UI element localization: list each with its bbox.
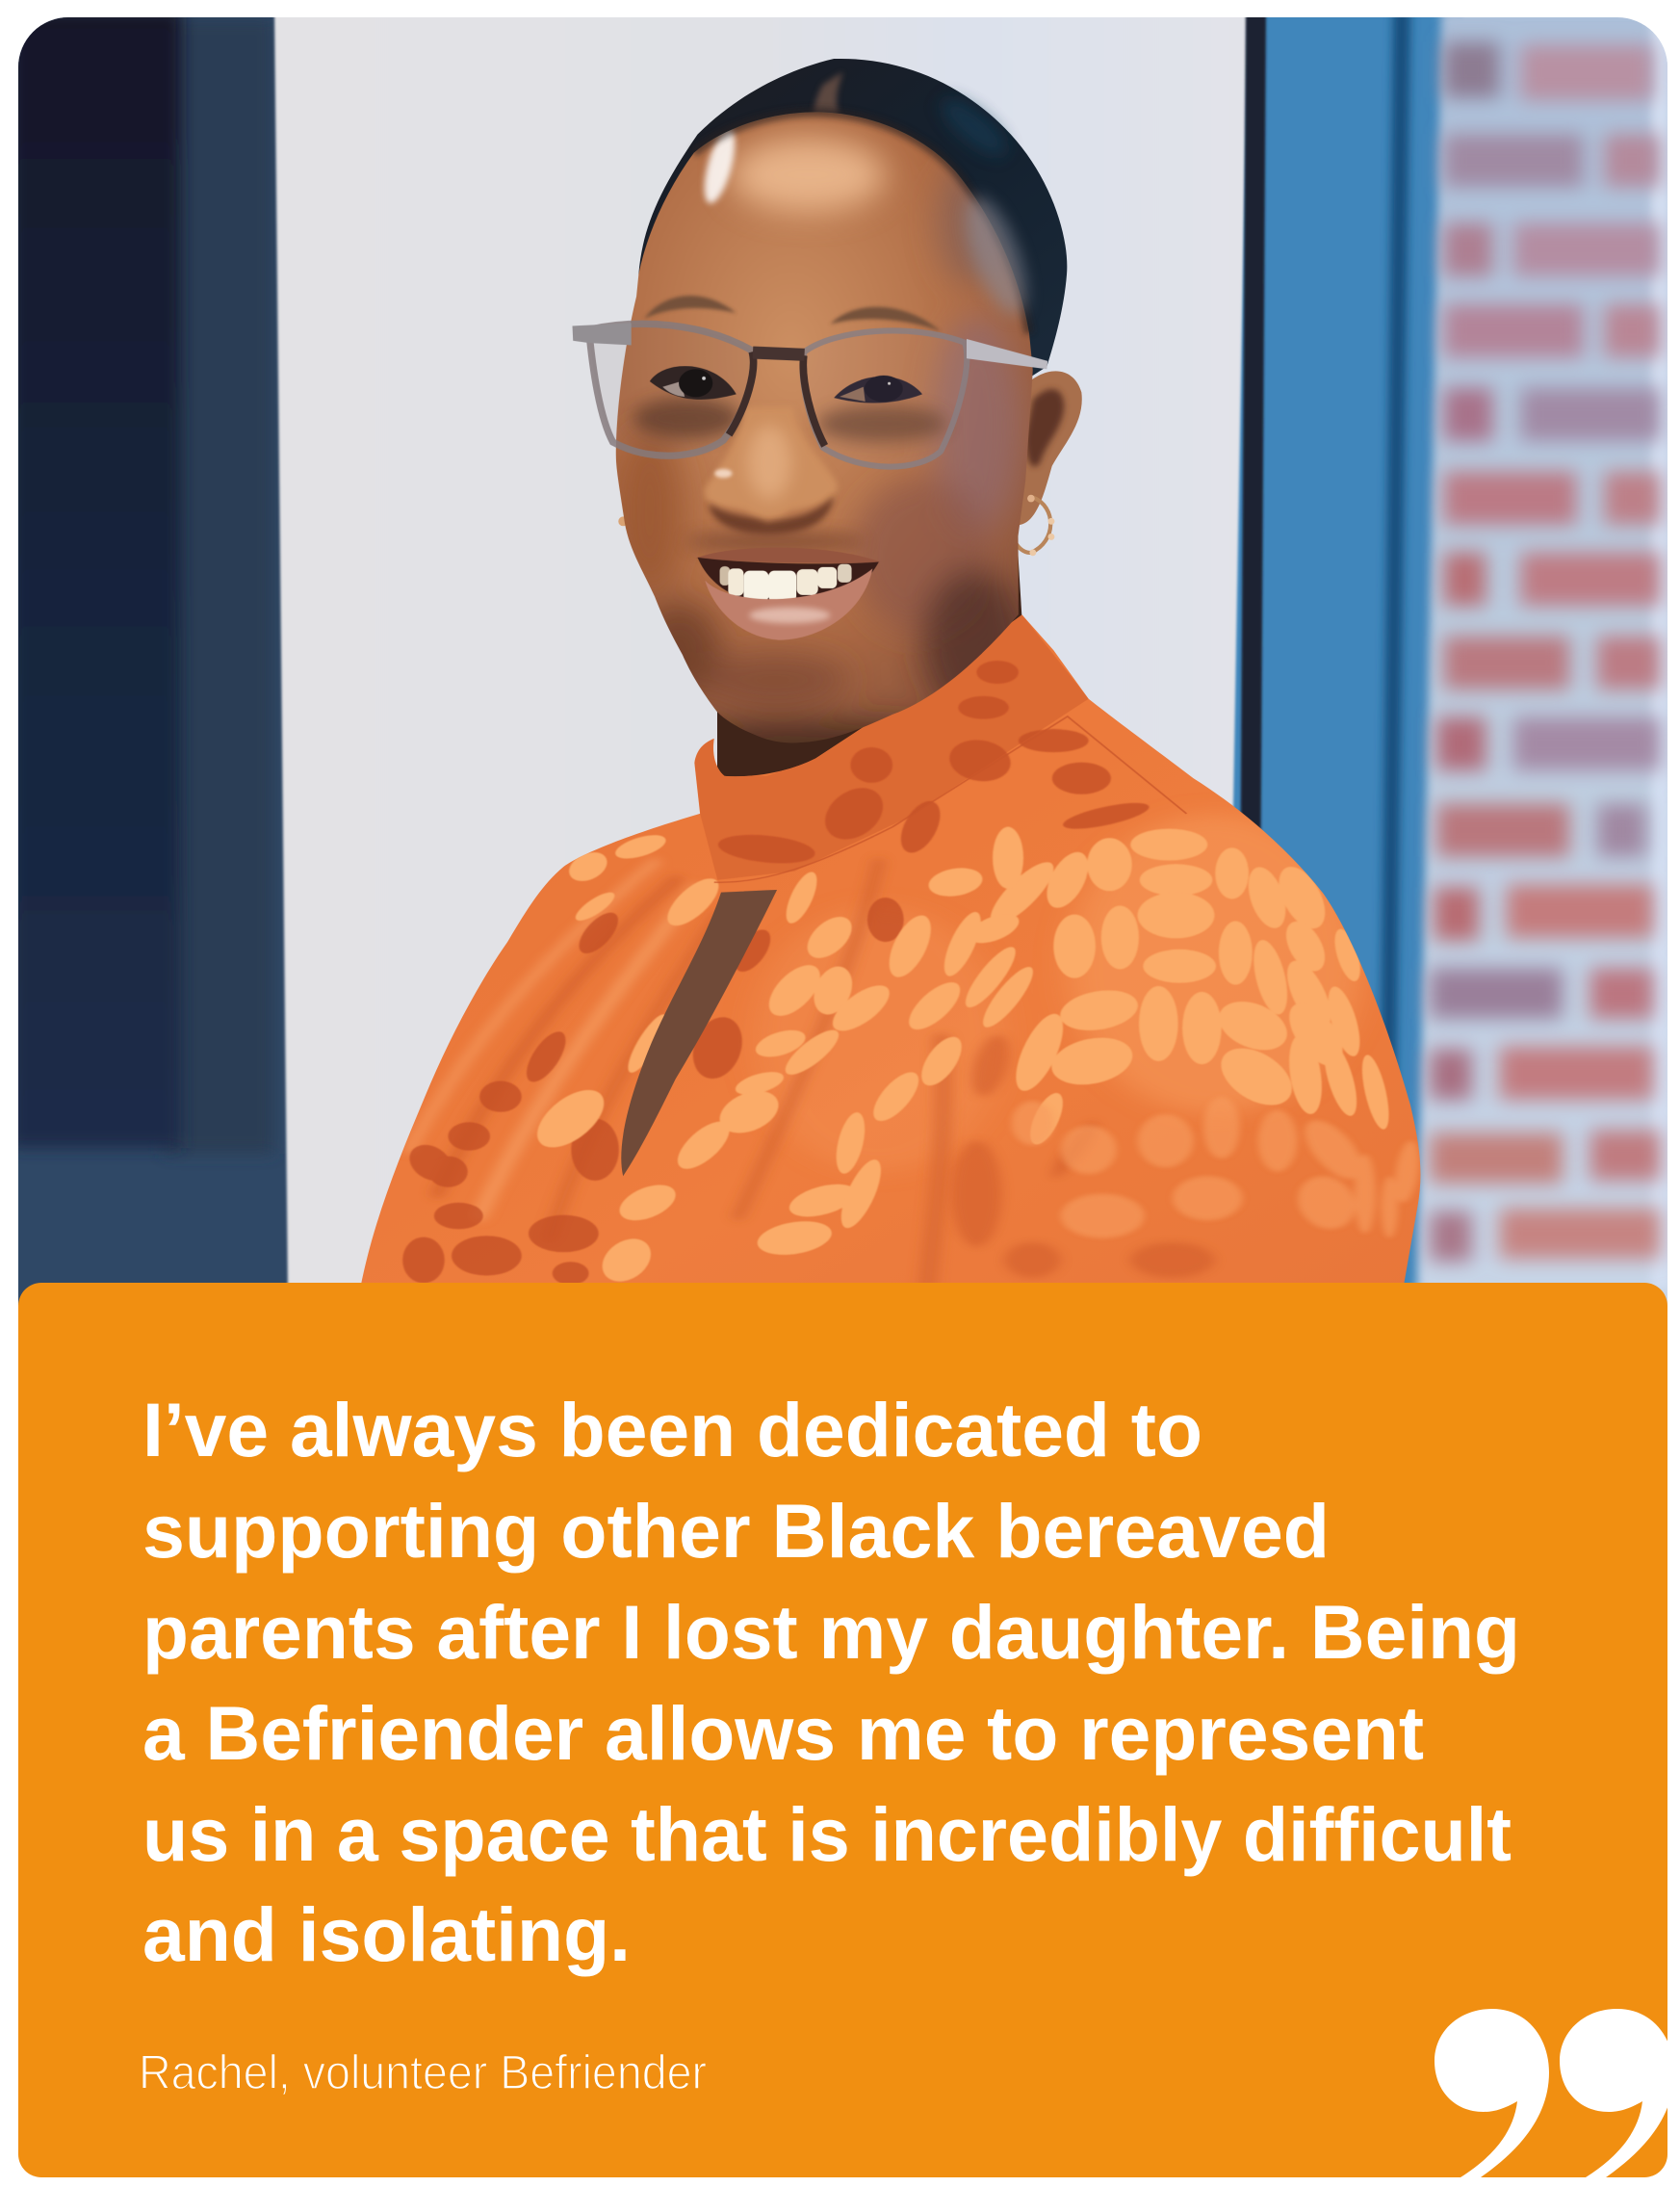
left earring stud: [618, 516, 626, 526]
attribution: Rachel, volunteer Befriender: [139, 2045, 707, 2099]
quote card: [18, 1283, 1674, 2177]
icon: closing quotation marks: [1434, 2009, 1674, 2177]
glasses: dark inner rim and bridge: [729, 351, 825, 446]
background: blue window frame: [1231, 17, 1453, 1283]
person: neck: [717, 553, 1022, 776]
background: pale wall: [274, 10, 1248, 1387]
blouse: lighter leaf pattern: [524, 827, 1394, 1286]
hair: grey sheen above the temple: [954, 190, 1038, 323]
background: blurred brick wall: [1415, 10, 1675, 1387]
blouse: glow behind the light pattern: [753, 814, 1361, 1172]
face: smiling mouth with teeth: [696, 548, 880, 640]
glasses: [572, 323, 1047, 467]
blouse: darker leaf pattern: [402, 661, 1153, 1285]
blouse: collar shading: [694, 614, 1089, 880]
face: eyebrows: [644, 296, 941, 331]
photo: portrait of Rachel: [10, 10, 1675, 1387]
glasses: left lens: [589, 324, 754, 456]
face: under-eye shadow: [633, 398, 946, 442]
quote text: a Befriender allows me to represent: [142, 1690, 1424, 1776]
soft hairline over the forehead edge: [694, 112, 1029, 333]
quote text: and isolating.: [142, 1891, 631, 1977]
quote text: supporting other Black bereaved: [142, 1488, 1330, 1574]
blouse: fabric folds: [409, 862, 943, 1287]
earring: gold hoop: [1015, 495, 1054, 556]
blouse: keyhole neckline opening: [621, 890, 777, 1176]
quote text: I’ve always been dedicated to: [142, 1387, 1202, 1472]
quote text: us in a space that is incredibly difficult: [142, 1791, 1512, 1877]
quote text: [142, 1387, 1520, 1977]
blouse: faded leaves on the lower right: [1012, 1097, 1422, 1238]
blouse: collar seam: [714, 716, 1186, 882]
hair: [638, 59, 1067, 385]
glasses: right lens: [803, 330, 967, 467]
ear: [1015, 371, 1082, 525]
face: nose: [686, 407, 864, 552]
person: head and face: [572, 59, 1082, 772]
blouse: soft dark mottling: [951, 1033, 1214, 1278]
face: forehead highlight: [700, 129, 739, 207]
person: orange patterned blouse: [347, 597, 1444, 1304]
background: dark panel on the left: [18, 17, 290, 1306]
face: eyes: [650, 366, 922, 403]
quote text: parents after I lost my daughter. Being: [142, 1589, 1520, 1675]
face: [616, 112, 1033, 743]
glasses: temple arm and hinges: [967, 339, 1047, 369]
